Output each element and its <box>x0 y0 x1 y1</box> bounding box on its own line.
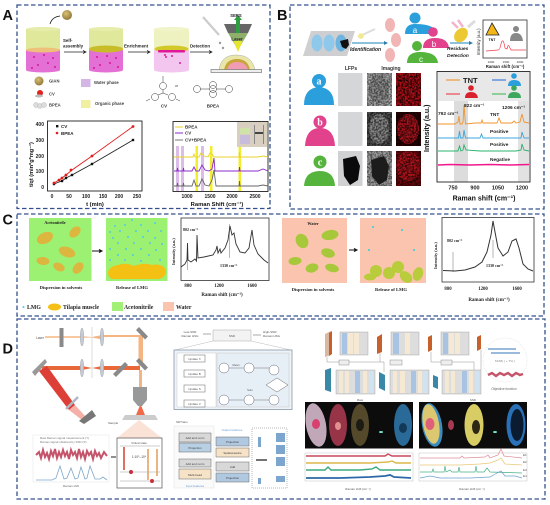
acetonitrile box: Acetonitrile <box>44 220 66 225</box>
Raman chart, water: 800 <box>444 287 452 292</box>
arrow: detection: Detection <box>190 44 210 48</box>
release of LMG, water: Release of LMG <box>375 287 407 292</box>
spectra legend: CV <box>185 130 191 136</box>
TNT inset chart: 1500 <box>503 60 510 64</box>
raw and SSD spectra: Raman signal obtained by SSD (X) <box>40 440 87 444</box>
residues detection: Residues <box>447 46 469 52</box>
residues detection <box>447 20 475 59</box>
acetonitrile box <box>29 218 92 290</box>
TNT inset chart: Intensity (a.u.) <box>476 28 481 55</box>
Raman chart, acetonitrile: 1330 cm⁻¹ <box>220 263 238 268</box>
kinetics line chart: 200 <box>115 194 123 200</box>
SDTrans block: Output features <box>222 428 243 432</box>
spectra legend: BPEA <box>185 124 198 130</box>
person c: c <box>419 55 423 64</box>
row c <box>304 151 421 186</box>
sample <box>122 415 158 420</box>
arrow C1 <box>92 250 102 252</box>
kinetics line chart: 150 <box>99 194 107 200</box>
virtual state diagram: 1:10⁵–10⁸ <box>132 455 147 459</box>
objective function: Objective function <box>491 387 517 391</box>
raw and SSD spectra: Raw Raman signal measurement (Y) <box>40 436 89 440</box>
row c: c <box>318 158 323 168</box>
water box: Water <box>307 221 319 226</box>
SERS spectra chart: 2000 <box>226 194 238 200</box>
Raman chart, acetonitrile <box>171 218 269 298</box>
water box: Dispersion in solvents <box>292 287 335 292</box>
water box <box>282 218 347 292</box>
panel B: latent fingerprints and TNT detection <box>277 5 544 209</box>
SSD flow <box>175 330 291 350</box>
kinetics line chart: BPEA <box>61 131 74 136</box>
arrow: detection <box>190 44 212 54</box>
TNT Raman chart: Positive <box>490 142 509 148</box>
Raman chart, water <box>433 218 534 303</box>
TNT Raman chart: Intensity (a.u.) <box>424 105 431 152</box>
cone <box>117 420 162 438</box>
panel D: SRS denoising system <box>2 319 545 499</box>
SERS spectra chart: 1000 <box>181 194 193 200</box>
SDTrans block: Projection <box>188 446 202 450</box>
Raman chart, acetonitrile: 1200 <box>214 284 224 289</box>
pink fingerprints <box>385 18 401 62</box>
Raman chart, water: 802 cm⁻¹ <box>447 238 463 243</box>
legend C <box>22 302 192 311</box>
panel label B: B <box>277 8 287 24</box>
beaker 3 <box>154 27 189 72</box>
legend: GIAN, CV, BPEA: BPEA <box>49 102 61 108</box>
raw image panel: Raw <box>357 398 364 402</box>
Raman chart, acetonitrile: Intensity (a.u.) <box>171 238 176 265</box>
kinetics line chart: 100 <box>82 194 90 200</box>
SSD architecture box: Update X <box>188 357 201 361</box>
row a <box>304 73 421 106</box>
beams <box>45 335 142 340</box>
SERS laser detection <box>211 13 262 72</box>
release of LMG, water <box>360 218 426 292</box>
inset photo <box>237 122 267 147</box>
CV structure: or <box>175 84 179 88</box>
kinetics line chart: 250 <box>133 194 141 200</box>
row b: b <box>317 118 323 128</box>
SSD architecture box: Sum <box>247 388 254 392</box>
person b <box>423 27 449 49</box>
virtual state diagram <box>111 438 162 488</box>
SSD flow: Raman HSIs <box>181 334 199 338</box>
kinetics line chart: 0 <box>41 185 44 191</box>
lens and detector <box>66 397 78 409</box>
SSD architecture box: Update V <box>188 402 201 406</box>
SDTrans block: Input features <box>186 484 205 488</box>
release of LMG, acetonitrile: Release of LMG <box>116 285 148 290</box>
TNT inset chart: 1000 <box>488 60 495 64</box>
residues detection: Detection <box>447 53 469 59</box>
arrow: enrichment: Enrichment <box>124 44 149 48</box>
SDTrans block: Projection <box>226 476 240 480</box>
TNT inset chart: Raman shift (cm⁻¹) <box>486 64 525 69</box>
TNT Raman chart: 1200 <box>516 186 528 192</box>
kinetics line chart <box>28 121 142 208</box>
kinetics line chart: 50 <box>66 194 72 200</box>
row a: a <box>316 76 322 88</box>
SERS laser detection: SERS <box>230 13 242 18</box>
TNT inset chart: 2000 <box>517 60 524 64</box>
BPEA structure: BPEA <box>207 104 220 108</box>
arrow: enrichment <box>124 44 150 54</box>
Raman chart, acetonitrile: Raman shift (cm⁻¹) <box>201 292 243 298</box>
pipette <box>203 17 224 49</box>
TNT Raman chart: 750 <box>448 186 458 192</box>
TNT Raman chart: Raman shift (cm⁻¹) <box>453 196 515 202</box>
SDTrans block: Add and norm <box>186 462 205 466</box>
raw and SSD spectra: Raman shift <box>63 484 79 488</box>
optical path diagram <box>32 327 162 438</box>
Raman chart, water: Raman shift (cm⁻¹) <box>468 297 510 303</box>
encoder-decoder network <box>325 331 527 394</box>
axis titles: t/qt (min*g*mg⁻¹) <box>28 142 35 187</box>
objective <box>133 387 147 406</box>
legend C: Water <box>176 305 192 311</box>
legend: water and organic phase <box>81 79 125 108</box>
decoder row <box>325 368 481 394</box>
Raman chart, acetonitrile: 800 <box>184 284 192 289</box>
TNT Raman chart: 792 cm⁻¹ <box>438 111 459 117</box>
raw component spectra <box>305 453 413 491</box>
arrow: identification: Identification <box>350 47 381 53</box>
virtual state diagram: Virtual state <box>131 441 147 445</box>
person b: b <box>432 40 437 49</box>
arrow: self-assembly: Self- <box>63 38 73 43</box>
TNT inset chart <box>476 20 527 69</box>
panel label D: D <box>2 342 13 358</box>
legend C: Acetonitrile <box>124 305 154 311</box>
objective function <box>483 338 527 391</box>
legend C: Tilapia muscle <box>63 305 100 311</box>
column headings: LFPs <box>345 66 357 72</box>
kinetics line chart: CV <box>61 124 67 129</box>
arrow: self-assembly <box>63 38 86 54</box>
arrow C2 <box>349 248 357 252</box>
Raman chart, acetonitrile: 802 cm⁻¹ <box>183 227 199 232</box>
fingerprint slide <box>303 31 355 56</box>
legend: GIAN, CV, BPEA: GIAN <box>49 78 59 84</box>
SDTrans block: Projection <box>226 440 240 444</box>
BPEA structure <box>194 82 232 108</box>
raw image panel <box>302 398 413 448</box>
legend: GIAN, CV, BPEA: CV <box>49 92 55 96</box>
kinetics line chart: t (min) <box>86 202 104 208</box>
person a: a <box>413 26 418 35</box>
spectra legend: CV+BPEA <box>185 138 207 142</box>
SERS spectra chart: 1500 <box>204 194 216 200</box>
gold nanoparticle with arrow <box>50 10 72 24</box>
SERS spectra chart <box>173 122 268 208</box>
optical path diagram: Laser <box>36 336 45 340</box>
CV structure: CV <box>161 104 167 108</box>
SERS laser detection: Laser <box>231 36 243 42</box>
SERS spectra chart: 2500 <box>249 194 261 200</box>
SSD component spectra: Raman shift (cm⁻¹) <box>459 487 485 491</box>
SDTrans block <box>174 420 287 488</box>
SSD flow: SSD <box>229 334 236 338</box>
SSD component spectra <box>419 449 527 491</box>
legend: GIAN, CV, BPEA <box>34 76 61 108</box>
panel C: tilapia muscle LMG extraction <box>2 212 544 316</box>
SSD architecture box: Mean <box>232 363 240 367</box>
release of LMG, acetonitrile <box>106 218 168 290</box>
panel label A: A <box>2 8 14 24</box>
person a <box>405 12 437 35</box>
CV structure <box>146 76 180 108</box>
Raman chart, water: 1600 <box>512 287 522 292</box>
panel label C: C <box>2 212 14 228</box>
TNT Raman chart: Negative <box>490 157 510 163</box>
SDTrans block: Add <box>230 465 235 469</box>
TNT Raman chart: 822 cm⁻¹ <box>464 103 485 109</box>
SSD image panel: SSD <box>470 398 477 402</box>
series <box>54 140 133 184</box>
SSD image panel <box>418 398 527 448</box>
TNT Raman chart: 1050 <box>492 186 504 192</box>
legend: TNT <box>463 76 478 85</box>
Raman chart, water: 1200 <box>478 287 488 292</box>
beaker 1 <box>26 27 60 72</box>
TNT Raman chart: TNT <box>490 112 499 118</box>
SDTrans block: Spatial-aware <box>223 451 242 455</box>
arrow: self-assembly: assembly <box>63 44 84 48</box>
TNT inset chart: TNT <box>489 38 496 42</box>
SSD architecture box: Update S <box>188 387 201 391</box>
SDTrans block: Add and norm <box>186 436 205 440</box>
legend <box>56 125 58 127</box>
kinetics line chart: 400 <box>36 122 44 128</box>
raw component spectra: Raman shift (cm⁻¹) <box>345 487 371 491</box>
SSD flow: Raman HSIs <box>263 334 281 338</box>
arrow: identification <box>350 29 388 53</box>
grating <box>32 359 47 376</box>
spectra legend <box>175 124 207 142</box>
Raman chart, acetonitrile: 1600 <box>247 284 257 289</box>
objective function: SSIM(·) + TV(·) <box>495 359 515 363</box>
legend: water and organic phase: Organic phase <box>95 101 125 106</box>
SSD flow: High-SNR <box>263 330 277 334</box>
Raman chart, water: Intensity (a.u.) <box>433 242 438 269</box>
SDTrans block: SDTrans <box>176 420 188 424</box>
beaker 2 <box>89 27 123 72</box>
kinetics line chart: 0 <box>51 194 54 200</box>
SERS spectra chart: Raman Shift (cm⁻¹) <box>191 201 243 208</box>
kinetics line chart: 300 <box>36 138 44 144</box>
SSD flow: Low-SNR <box>184 330 197 334</box>
legend C: LMG <box>27 305 41 311</box>
legend: water and organic phase: Water phase <box>94 80 119 85</box>
SSD component spectra: E2 <box>523 460 527 464</box>
raw and SSD spectra <box>33 435 109 488</box>
SSD architecture box: Update B <box>188 372 201 376</box>
TNT Raman chart: 900 <box>470 186 480 192</box>
SSD component spectra: E3 <box>523 468 527 472</box>
SSD component spectra: E4 <box>523 474 527 478</box>
kinetics line chart: 200 <box>36 154 44 160</box>
row b <box>305 112 421 146</box>
TNT Raman chart <box>424 72 530 202</box>
kinetics line chart: 100 <box>36 169 44 175</box>
TNT Raman chart: 1206 cm⁻¹ <box>502 105 525 111</box>
encoder row <box>325 331 481 357</box>
TNT Raman chart: Positive <box>490 129 509 135</box>
optical path diagram: Sample <box>108 421 119 425</box>
SSD architecture box <box>174 350 292 410</box>
panel A: self-assembly SERS detection <box>2 5 270 208</box>
acetonitrile box: Dispersion in solvents <box>40 285 83 290</box>
Raman chart, water: 1330 cm⁻¹ <box>486 263 504 268</box>
panel B: latent fingerprints and TNT detection: Imaging <box>381 66 401 72</box>
SSD component spectra: E1 <box>523 453 527 457</box>
person c <box>407 41 438 64</box>
SDTrans block: Multi-head <box>188 473 202 477</box>
